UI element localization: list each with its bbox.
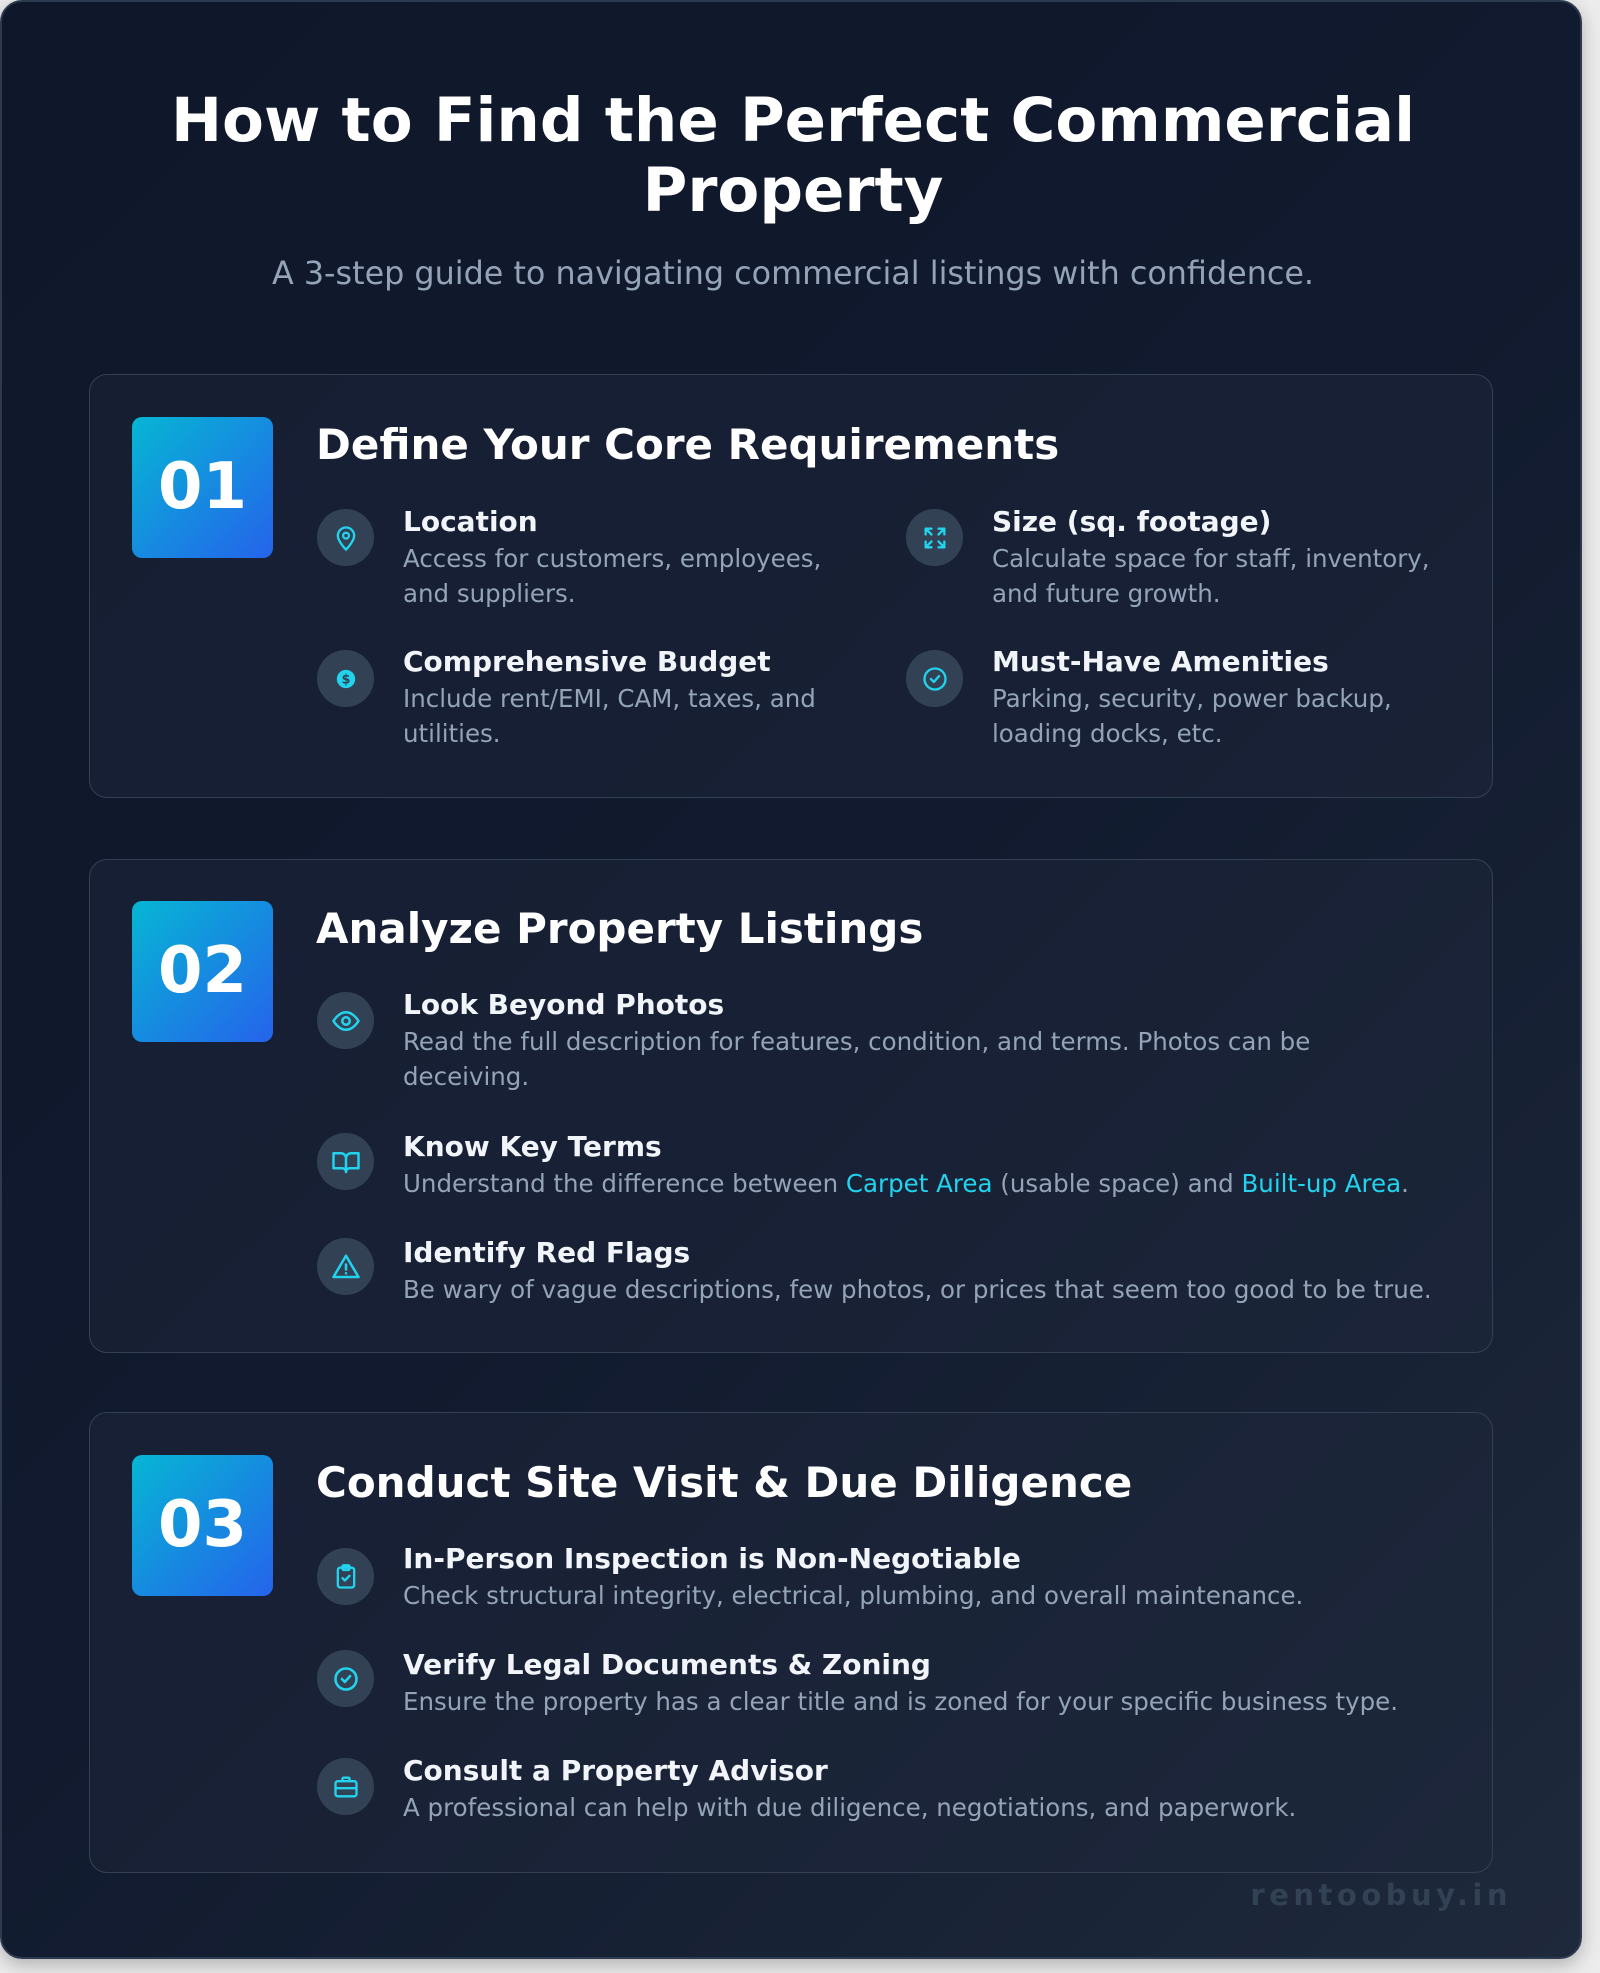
item: look beyond photos: Read the full description for features, condition, and terms. Photos can be deceiving. — [403, 1027, 1310, 1091]
panel: step 3 — [89, 1412, 1493, 1873]
item: amenities: Parking, security, power backup, loading docks, etc. — [992, 684, 1392, 748]
item: amenities: Must-Have Amenities — [992, 645, 1329, 678]
icon: budget: $ — [341, 672, 350, 687]
step 3 number: 03 — [158, 1488, 247, 1562]
item: location: Access for customers, employees, and suppliers. — [403, 544, 821, 608]
icon: location — [317, 509, 374, 566]
item: red flags — [403, 1236, 1432, 1304]
item: property advisor: A professional can help with due diligence, negotiations, and paperwork. — [403, 1793, 1296, 1822]
step 1 number: 01 — [158, 450, 247, 524]
step 3 number — [132, 1455, 273, 1596]
item: amenities — [992, 645, 1392, 748]
item: look beyond photos: Look Beyond Photos — [403, 988, 724, 1021]
icon: verified — [317, 1650, 374, 1707]
item: size: Calculate space for staff, inventory, and future growth. — [992, 544, 1430, 608]
icon: warning — [317, 1238, 374, 1295]
item: in-person inspection — [403, 1542, 1303, 1610]
icon: book — [317, 1133, 374, 1190]
step 2 heading: Analyze Property Listings — [316, 904, 923, 953]
item: size — [992, 505, 1430, 608]
icon: eye — [317, 992, 374, 1049]
item: red flags: Be wary of vague descriptions, few photos, or prices that seem too good to be true. — [403, 1275, 1432, 1304]
item: key terms — [403, 1130, 1409, 1198]
item: budget — [403, 645, 816, 748]
item: key terms: Understand the difference between Carpet Area (usable space) and Built-up Area. — [403, 1169, 1409, 1198]
item: size: Size (sq. footage) — [992, 505, 1271, 538]
subtitle: A 3-step guide to navigating commercial listings with confidence. — [272, 255, 1314, 292]
step 1 number — [132, 417, 273, 558]
item: budget: Include rent/EMI, CAM, taxes, and utilities. — [403, 684, 816, 748]
step 2 number — [132, 901, 273, 1042]
icon: budget — [317, 650, 374, 707]
item: in-person inspection: In-Person Inspection is Non-Negotiable — [403, 1542, 1021, 1575]
panel: step 1 — [89, 374, 1493, 798]
icon: size — [906, 509, 963, 566]
title: How to Find the Perfect Commercial — [171, 85, 1415, 156]
item: legal documents — [403, 1648, 1398, 1716]
item: location — [403, 505, 821, 608]
title — [171, 85, 1415, 226]
step 1 heading: Define Your Core Requirements — [316, 420, 1059, 469]
item: look beyond photos — [403, 988, 1310, 1091]
panel: step 2 — [89, 859, 1493, 1353]
item: key terms: Know Key Terms — [403, 1130, 662, 1163]
item: in-person inspection: Check structural integrity, electrical, plumbing, and overall maintenance. — [403, 1581, 1303, 1610]
step 3 heading: Conduct Site Visit & Due Diligence — [316, 1458, 1132, 1507]
item: location: Location — [403, 505, 538, 538]
step 2 number: 02 — [158, 934, 247, 1008]
item: budget: Comprehensive Budget — [403, 645, 771, 678]
item: property advisor: Consult a Property Advisor — [403, 1754, 828, 1787]
item: legal documents: Verify Legal Documents & Zoning — [403, 1648, 931, 1681]
item: red flags: Identify Red Flags — [403, 1236, 690, 1269]
icon: clipboard — [317, 1548, 374, 1605]
icon: briefcase — [317, 1758, 374, 1815]
watermark: rentoobuy.in — [1250, 1878, 1512, 1912]
icon: amenities — [906, 650, 963, 707]
item: legal documents: Ensure the property has a clear title and is zoned for your specific business type. — [403, 1687, 1398, 1716]
title: Property — [643, 155, 943, 226]
item: property advisor — [403, 1754, 1296, 1822]
